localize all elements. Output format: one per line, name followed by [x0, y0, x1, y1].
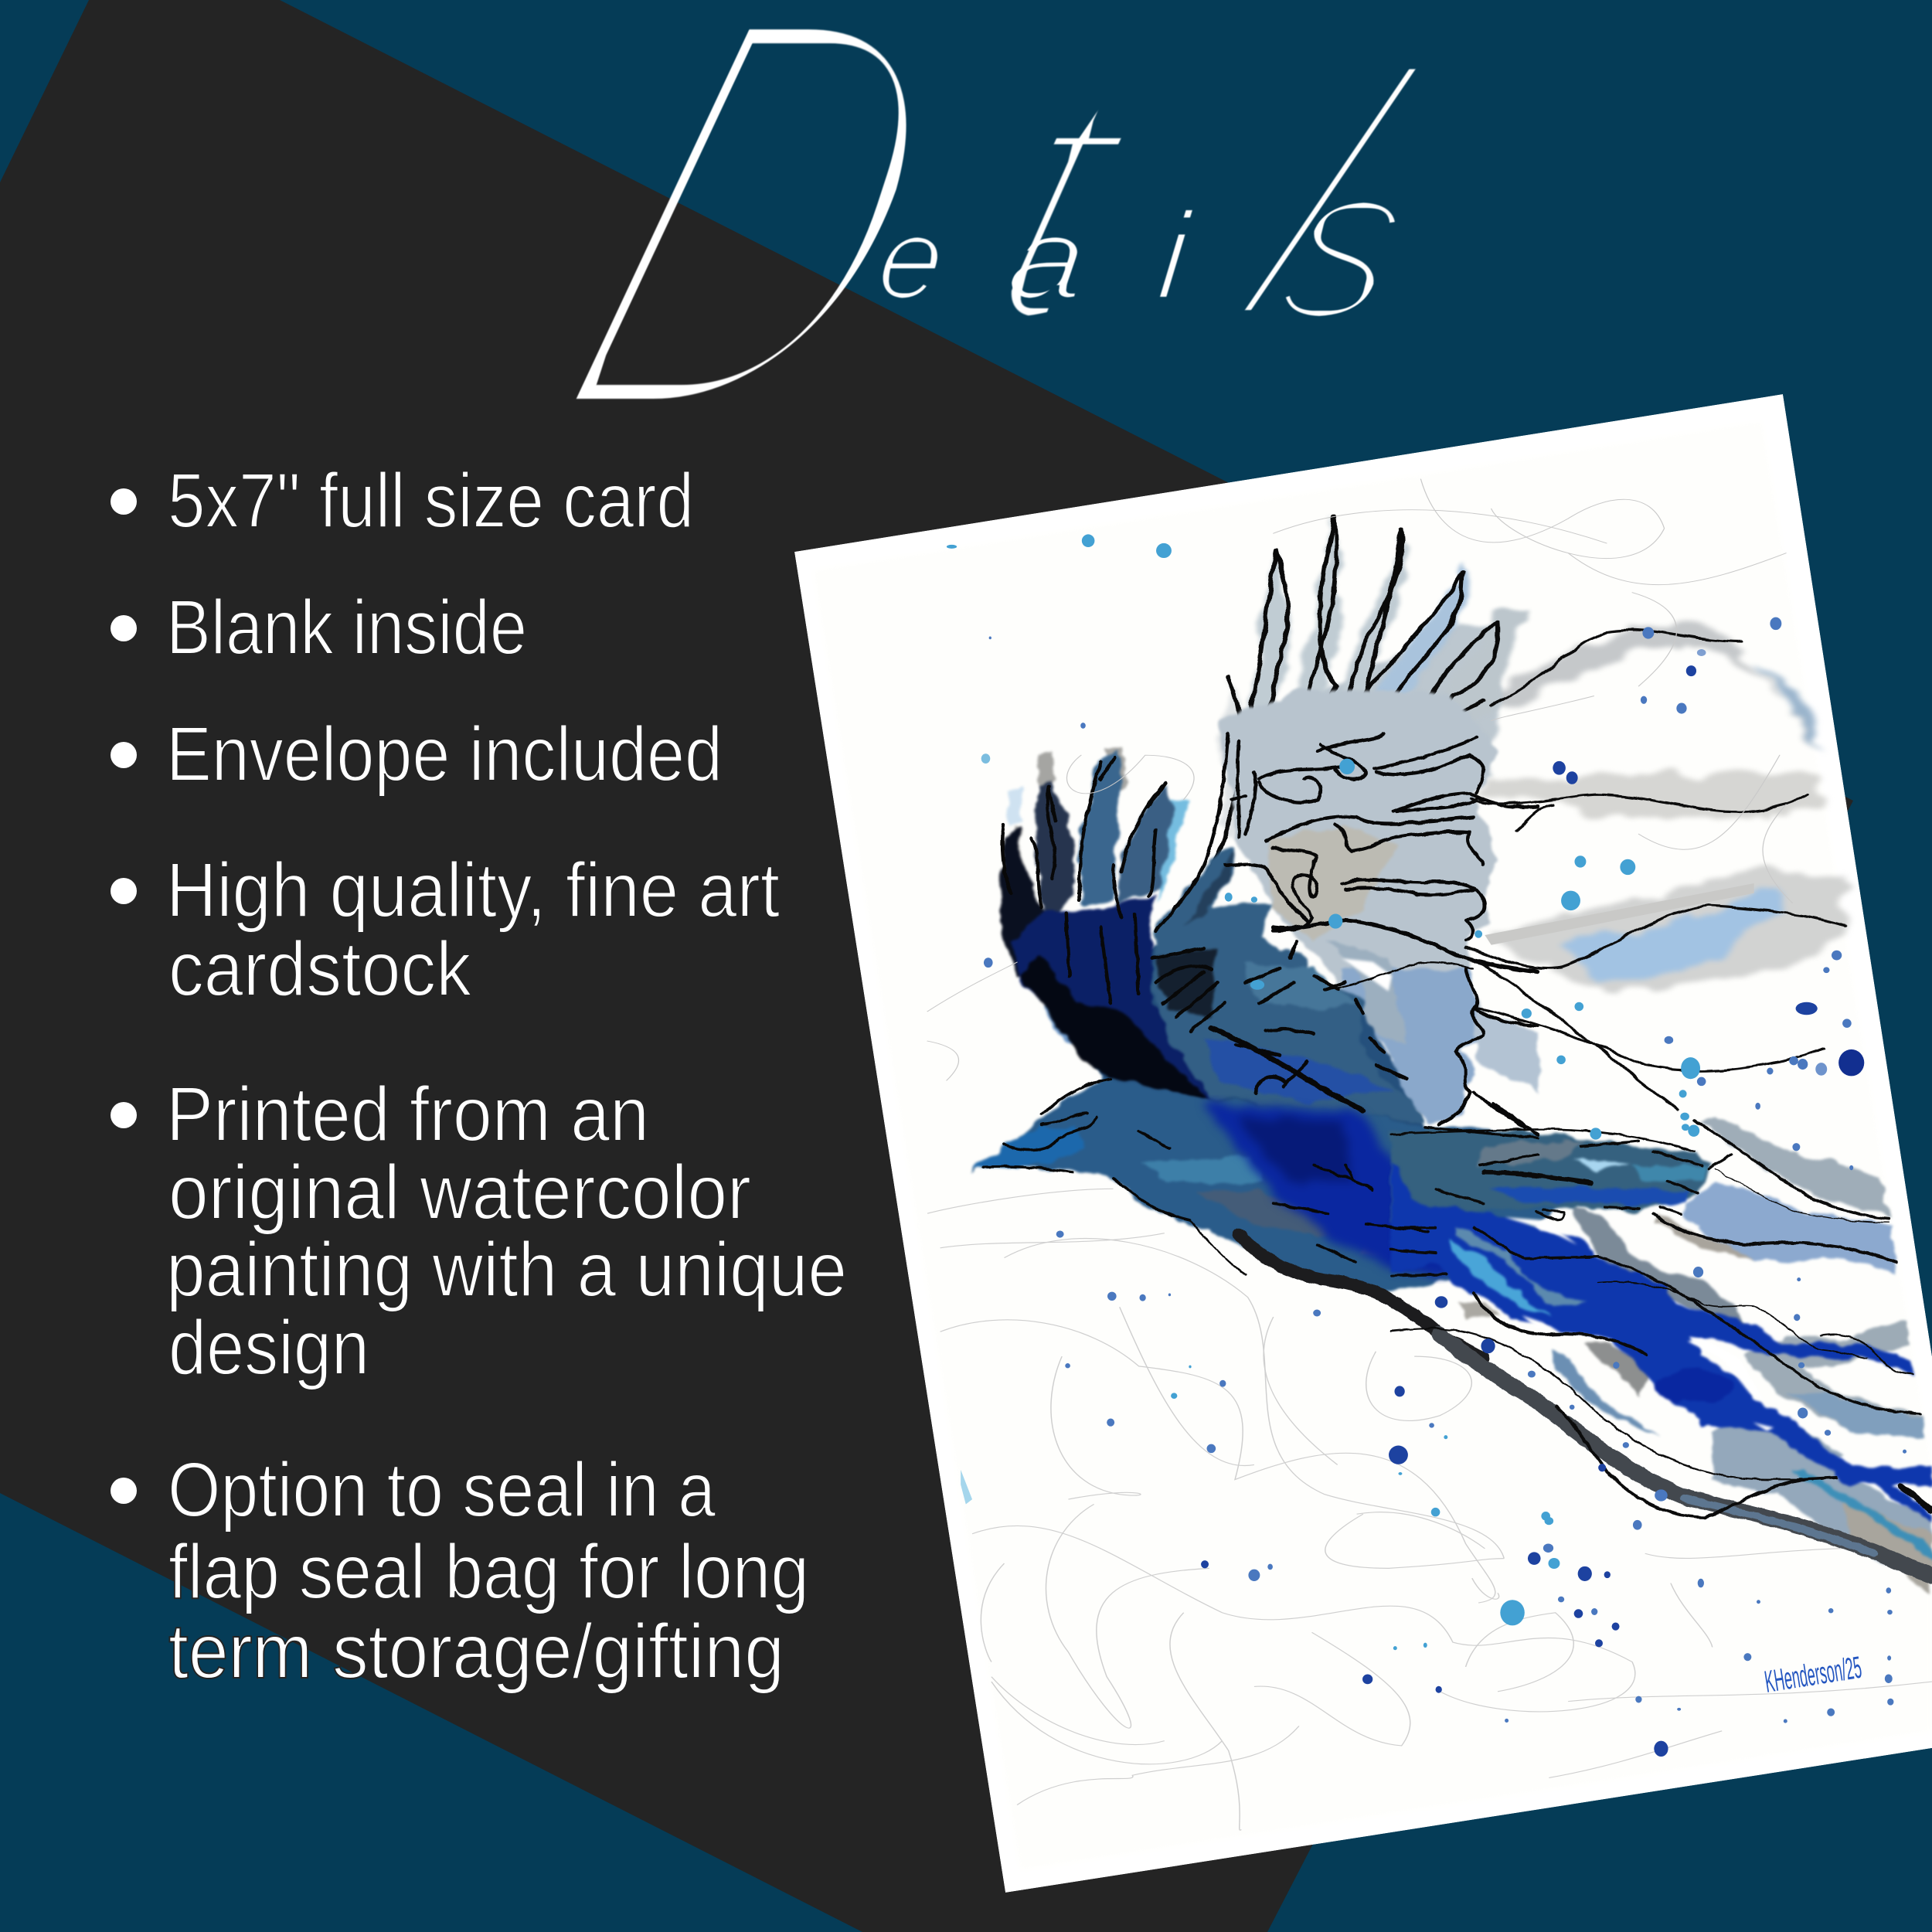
body tail [1391, 1131, 1712, 1224]
head and body ink [983, 1079, 1538, 1275]
bullet: printed from original: design [168, 1304, 369, 1391]
bullet: flap seal option: flap seal bag for long [168, 1529, 809, 1615]
feathers [1216, 516, 1523, 839]
body and head [971, 1079, 1566, 1293]
bullet: printed from original [111, 1071, 847, 1391]
wing and body ink [983, 734, 1538, 1275]
title: e [872, 193, 951, 323]
pencil scribbles top [927, 479, 1792, 1080]
painting: bird and tail [971, 689, 1932, 1594]
bullet: blank inside: Blank inside [166, 584, 527, 671]
title: t [957, 0, 1172, 399]
paint stain left edge [961, 1470, 972, 1504]
washes to the right of the wing [1481, 624, 1845, 997]
white gaps [1342, 958, 1393, 1062]
painting: paint drops lower [961, 1230, 1906, 1757]
painting: flowing ink and drops upper [927, 479, 1864, 1238]
pencil scribbles [927, 1189, 1932, 1830]
feather ink [1209, 516, 1498, 873]
bullet: flap seal option [111, 1447, 809, 1695]
white gaps in tail [1505, 1217, 1774, 1431]
card paper [794, 394, 1932, 1893]
title: s [1260, 116, 1434, 366]
bullet list [111, 457, 847, 1695]
bullet: flap seal option: term storage/gifting [168, 1608, 784, 1695]
wing contours [1155, 734, 1538, 1134]
title: l [1184, 0, 1466, 394]
deep blue body core [1204, 1104, 1515, 1275]
bullet: envelope: Envelope included [166, 711, 723, 798]
ink flowing from wing [1466, 630, 1844, 1110]
bullet: printed from original: Printed from an [166, 1071, 649, 1158]
mid feathers [1152, 848, 1425, 1124]
deep blue stream [1391, 1162, 1932, 1559]
bullet: printed from original: original watercolor [168, 1149, 751, 1236]
title: a [1002, 194, 1093, 324]
bullet: flap seal option: Option to seal in a [168, 1447, 716, 1533]
tail ink [1391, 1121, 1932, 1517]
bullet: cardstock: cardstock [168, 926, 472, 1012]
charcoal band [1239, 1234, 1932, 1576]
grey wing wash [1218, 689, 1538, 1124]
lower dark wing feathers [1000, 748, 1211, 1100]
bullet: card size: 5x7" full size card [168, 457, 694, 544]
bullet: cardstock [111, 847, 780, 1012]
feather base wash [1323, 622, 1502, 779]
card with watercolor painting [794, 394, 1932, 1893]
drops [1056, 1230, 1906, 1757]
painting: upper wing and right washes [1209, 516, 1845, 997]
bullet: printed from original: painting with a unique [166, 1226, 847, 1313]
tail streams [1239, 1117, 1932, 1594]
grey and light-blue washes [1460, 1117, 1932, 1594]
title: i [1152, 186, 1198, 325]
feather hatching [1002, 758, 1407, 1111]
underlay [1042, 948, 1549, 1272]
grey streak [1485, 883, 1754, 945]
paint drops upper [947, 534, 1864, 1238]
title [501, 0, 1466, 536]
bullet: cardstock: High quality, fine art [166, 847, 780, 934]
